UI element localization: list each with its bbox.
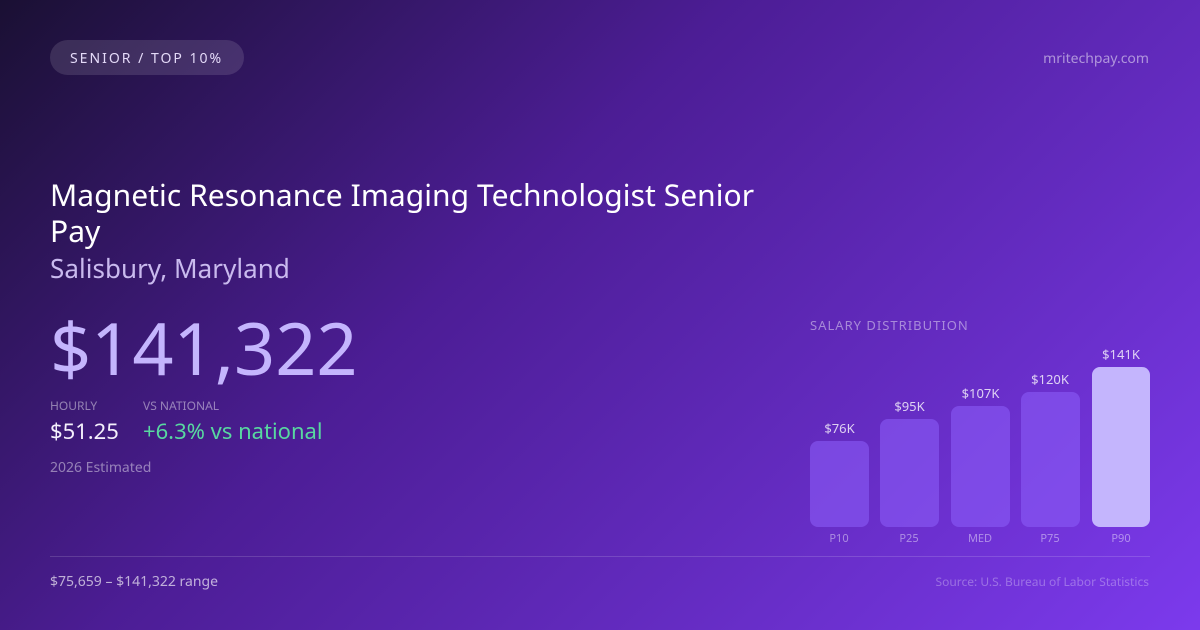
value label: $107K — [962, 384, 999, 402]
chart heading: SALARY DISTRIBUTION — [810, 316, 969, 334]
vs national label: VS NATIONAL — [143, 397, 219, 414]
bar — [880, 419, 939, 527]
title — [50, 174, 754, 251]
value label: $120K — [1031, 370, 1069, 388]
site domain: mritechpay.com — [1043, 49, 1149, 68]
bar MED — [951, 384, 1010, 546]
footer source: Source: U.S. Bureau of Labor Statistics — [936, 573, 1149, 590]
value label: $95K — [894, 397, 925, 415]
title: Magnetic Resonance Imaging Technologist Senior — [50, 174, 754, 215]
value label: $141K — [1102, 345, 1140, 363]
bar — [810, 441, 869, 527]
bar P75 — [1021, 370, 1080, 546]
bar — [1021, 392, 1080, 527]
footer range: $75,659 – $141,322 range — [50, 572, 218, 591]
location subtitle: Salisbury, Maryland — [50, 250, 290, 286]
year note: 2026 Estimated — [50, 458, 151, 477]
percentile label: P10 — [829, 531, 849, 546]
bar P25 — [880, 397, 939, 546]
stat: vs national — [143, 397, 323, 446]
bar — [1092, 367, 1150, 527]
percentile label: P90 — [1111, 531, 1131, 546]
bar P10 — [810, 419, 869, 546]
main salary figure: $141,322 — [50, 299, 358, 397]
bar — [951, 406, 1010, 527]
stat: hourly — [50, 397, 119, 446]
vs national value: +6.3% vs national — [143, 416, 323, 446]
percentile label: MED — [968, 531, 992, 546]
value label: $76K — [824, 419, 855, 437]
badge: senior / top 10% — [50, 40, 244, 75]
badge: senior / top 10%: SENIOR / TOP 10% — [70, 49, 223, 68]
title: Pay — [50, 210, 100, 251]
percentile label: P75 — [1040, 531, 1060, 546]
hourly value: $51.25 — [50, 416, 119, 446]
bar P90 — [1092, 345, 1150, 546]
hourly label: HOURLY — [50, 397, 97, 414]
percentile label: P25 — [899, 531, 919, 546]
